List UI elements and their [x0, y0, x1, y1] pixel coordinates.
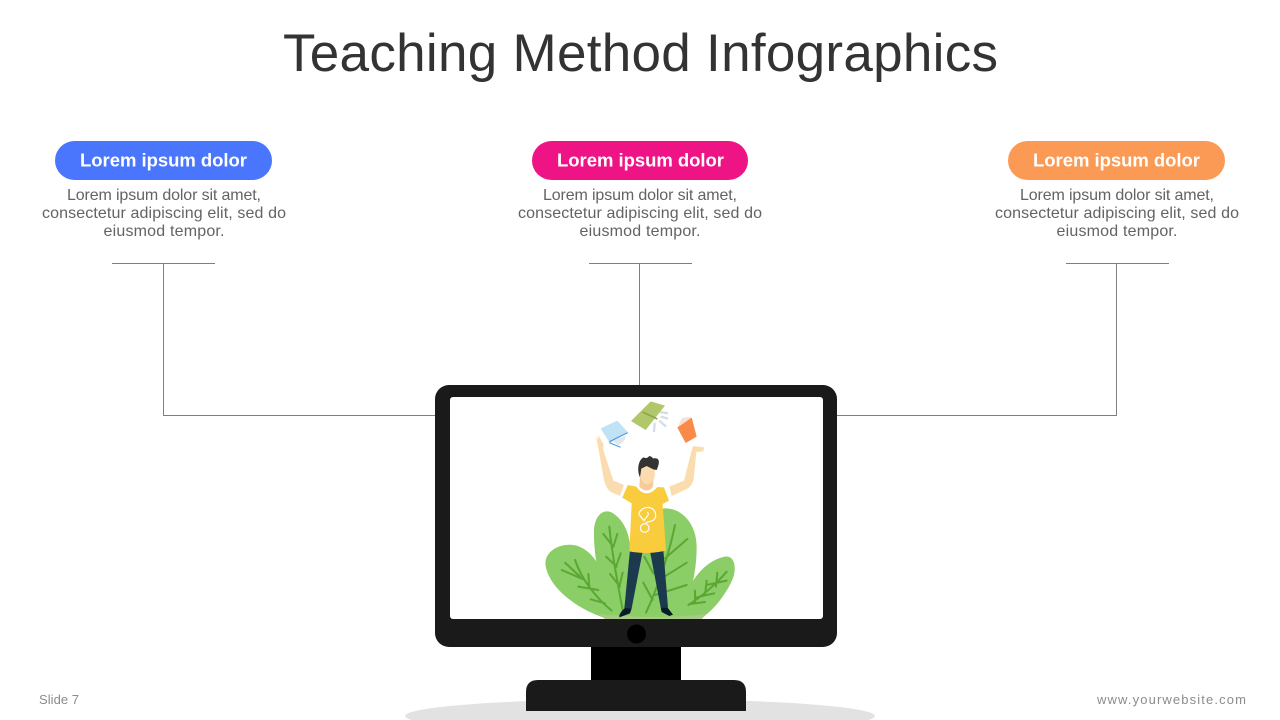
legs [624, 550, 668, 608]
neck and face [639, 477, 654, 491]
monitor button [627, 624, 646, 644]
footer: slide number: Slide 7 [39, 692, 79, 707]
right body text [995, 187, 1239, 240]
panel: left column [42, 141, 435, 416]
center pill heading: Lorem ipsum dolor [557, 150, 724, 170]
leaf veins [562, 525, 727, 613]
collar [637, 486, 657, 493]
left pill heading [55, 141, 272, 180]
monitor screen [450, 397, 823, 619]
monitor [405, 385, 875, 720]
right pill heading: Lorem ipsum dolor [1033, 150, 1200, 170]
footer: website: www.yourwebsite.com [1096, 692, 1246, 707]
center body text: consectetur adipiscing elit, sed do [518, 205, 762, 222]
right body text: consectetur adipiscing elit, sed do [995, 205, 1239, 222]
title: Teaching Method Infographics [283, 24, 998, 83]
question mark [639, 507, 656, 532]
panel: center column [518, 141, 762, 385]
right pill heading [1008, 141, 1225, 180]
center body text [518, 187, 762, 240]
left body text: consectetur adipiscing elit, sed do [42, 205, 286, 222]
sleeves [622, 485, 627, 497]
left connector [112, 264, 435, 416]
t-shirt [622, 485, 669, 553]
icon: person [596, 435, 704, 617]
right body text: eiusmod tempor. [1056, 223, 1178, 240]
left pill heading: Lorem ipsum dolor [80, 150, 247, 170]
left body text [42, 187, 286, 240]
monitor neck [591, 645, 681, 681]
center body text: Lorem ipsum dolor sit amet, [543, 187, 737, 204]
illustration: person juggling books [545, 401, 735, 619]
icon: orange book [677, 417, 697, 443]
shoes [619, 608, 632, 617]
monitor shadow [405, 699, 875, 720]
arms [596, 435, 624, 496]
icon: plants [545, 508, 735, 619]
left body text: eiusmod tempor. [104, 223, 224, 240]
monitor body [435, 385, 837, 647]
center body text: eiusmod tempor. [580, 223, 700, 240]
left body text: Lorem ipsum dolor sit amet, [67, 187, 261, 204]
center pill heading [532, 141, 748, 180]
icon: blue book [601, 421, 628, 447]
icon: green book [631, 401, 668, 432]
right connector [837, 264, 1169, 416]
panel: right column [837, 141, 1239, 416]
monitor base [526, 680, 746, 711]
hair [638, 456, 659, 477]
center connector [589, 264, 692, 385]
right body text: Lorem ipsum dolor sit amet, [1020, 187, 1214, 204]
